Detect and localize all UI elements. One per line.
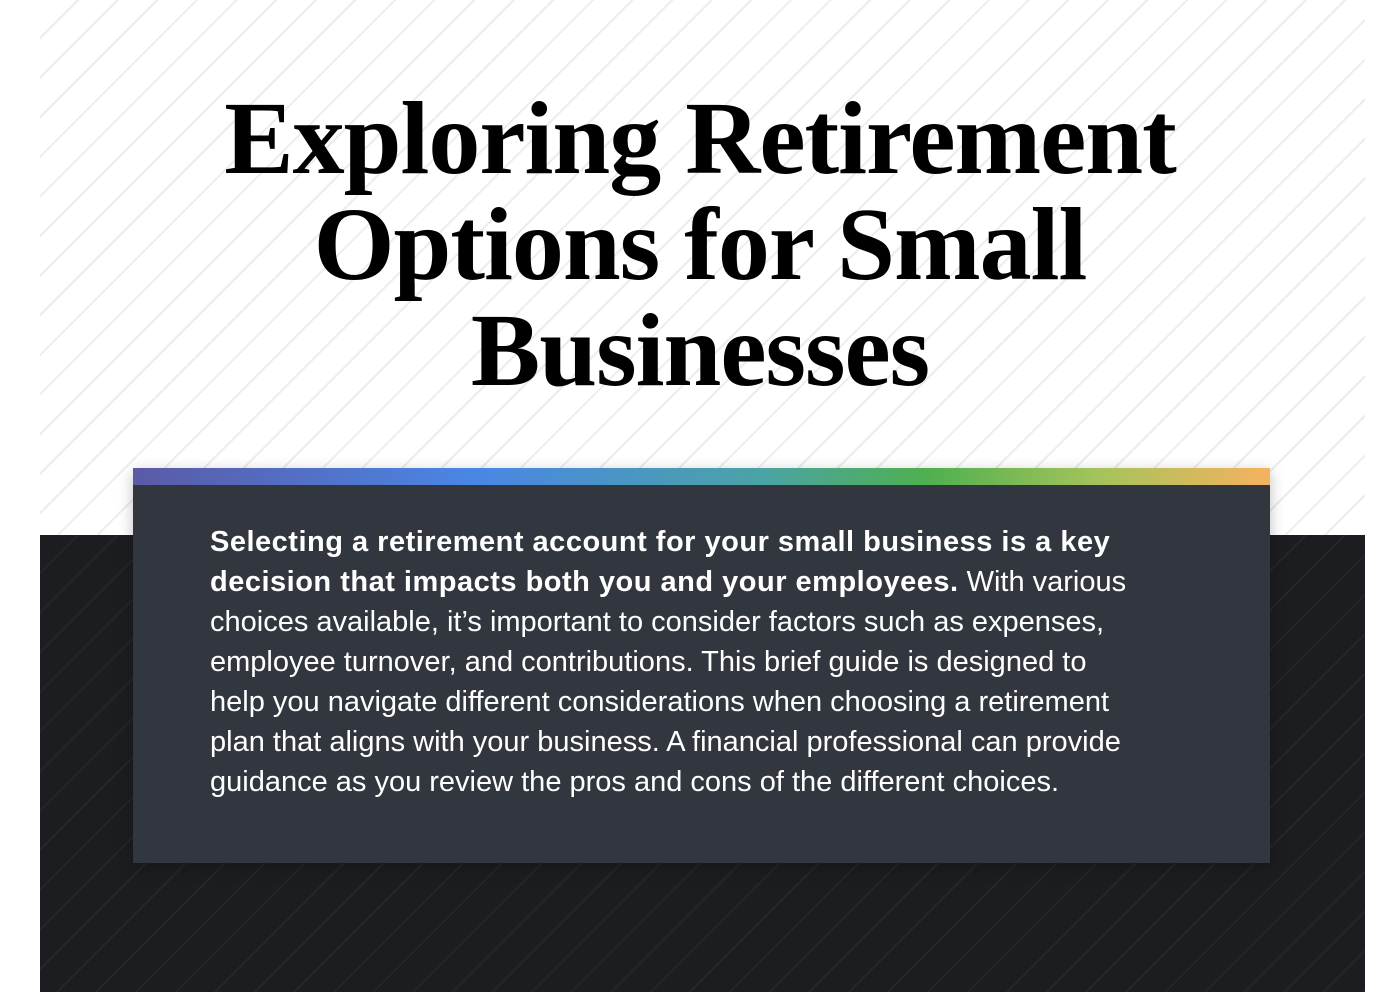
intro text: decision that impacts both you and your employees. With various — [210, 566, 1126, 598]
title — [224, 81, 1176, 408]
intro text: choices available, it’s important to consider factors such as expenses, — [210, 606, 1104, 638]
panel: intro card — [133, 468, 1270, 863]
title: Exploring Retirement — [224, 81, 1176, 196]
intro text — [210, 526, 1126, 798]
title: Businesses — [471, 293, 929, 408]
intro text: Selecting a retirement account for your small business is a key — [210, 526, 1110, 558]
intro text: guidance as you review the pros and cons of the different choices. — [210, 766, 1059, 798]
intro text: employee turnover, and contributions. This brief guide is designed to — [210, 646, 1086, 678]
intro text: help you navigate different considerations when choosing a retirement — [210, 686, 1109, 718]
title: Options for Small — [314, 187, 1086, 302]
intro text: plan that aligns with your business. A financial professional can provide — [210, 726, 1121, 758]
gradient bar — [133, 468, 1270, 485]
